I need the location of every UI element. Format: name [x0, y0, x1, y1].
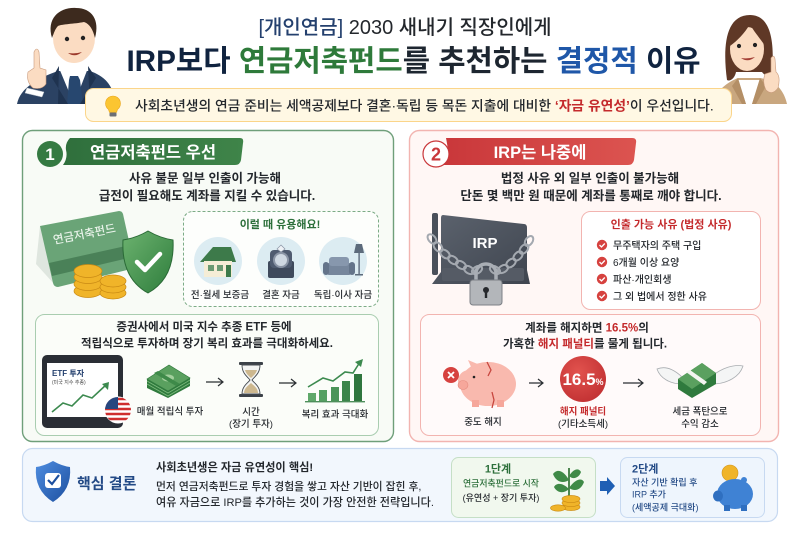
- label: 결혼 자금: 결혼 자금: [262, 289, 300, 301]
- box heading: 인출 가능 사유 (법정 사유): [611, 217, 732, 231]
- box text: [503, 320, 667, 350]
- step 1 card: (유연성 + 장기 투자): [463, 492, 539, 503]
- reason 3: [597, 273, 672, 286]
- number badge 2: [423, 141, 449, 167]
- arrow: [623, 379, 643, 387]
- label: 시간 (장기 투자): (장기 투자): [229, 418, 273, 430]
- box text: 가혹한 해지 패널티를 물게 됩니다.: [503, 336, 667, 350]
- arrow: [279, 379, 296, 387]
- reason 4: 그 외 법에서 정한 사유: [613, 291, 707, 303]
- character: woman in tan jacket pointing up: [713, 15, 787, 104]
- box: ETF investing flow: [36, 314, 378, 436]
- icon: hourglass: [239, 362, 263, 397]
- box text: 적립식으로 투자하며 장기 복리 효과를 극대화하세요.: [81, 336, 333, 350]
- badge: 16.5%: [560, 356, 606, 402]
- number badge 2: 2: [431, 144, 441, 164]
- reason 2: [597, 256, 679, 269]
- panel: key conclusion: [22, 448, 778, 522]
- label: 전·월세 보증금: 전·월세 보증금: [191, 289, 249, 301]
- conclusion text: 여유 자금으로 IRP를 추가하는 것이 가장 안전한 전략입니다.: [156, 495, 434, 509]
- number badge 1: 1: [45, 145, 55, 164]
- icon: cash with wings: [657, 363, 743, 398]
- icon: pension card with shield and coins: [36, 211, 173, 299]
- title line 1: [개인연금] 2030 새내기 직장인에게: [258, 16, 552, 39]
- step 2 card: (세액공제 극대화): [632, 502, 698, 512]
- icon: broken piggy bank: [443, 360, 516, 408]
- box: termination penalty flow: [420, 314, 760, 436]
- label: 시간 (장기 투자): 시간: [242, 407, 260, 418]
- reason 2: 6개월 이상 요양: [613, 256, 679, 269]
- panel subheading: 사유 불문 일부 인출이 가능해: [129, 170, 281, 186]
- panel subheading: 단돈 몇 백만 원 때문에 계좌를 통째로 깨야 합니다.: [460, 188, 722, 203]
- step 1 card: 연금저축펀드로 시작: [463, 478, 539, 488]
- panel subheading: 급전이 필요해도 계좌를 지킬 수 있습니다.: [99, 188, 315, 203]
- icon: chained IRP vault: IRP: [472, 235, 498, 252]
- icon: light bulb: [106, 96, 121, 116]
- conclusion text: [156, 460, 434, 509]
- conclusion text: 사회초년생은 자금 유연성이 핵심!: [156, 460, 313, 474]
- title line 2: IRP보다 연금저축펀드를 추천하는 결정적 이유: [126, 45, 701, 78]
- icon: tablet with ETF chart: (미국 지수 추종): [52, 379, 86, 386]
- icon: chained IRP vault: [426, 213, 535, 305]
- box text: [81, 320, 333, 350]
- box: legal withdrawal reasons: [582, 212, 760, 310]
- chart: compound growth bars: [305, 359, 365, 402]
- icon: sprout on coins: [550, 468, 584, 511]
- step 1 card: [452, 458, 596, 518]
- step 2 card: 2단계: [632, 462, 658, 476]
- icon: US flag: [104, 396, 132, 424]
- step 2 card: 자산 기반 확립 후: [632, 476, 697, 488]
- panel subheading: 법정 사유 외 일부 인출이 불가능해: [501, 170, 679, 186]
- icon: tablet with ETF chart: [42, 355, 132, 428]
- box text: 계좌를 해지하면 16.5%의: [525, 320, 649, 334]
- step 1 card: 1단계: [485, 462, 511, 476]
- title: [126, 16, 701, 78]
- tip banner: [86, 88, 732, 122]
- label: 해지 패널티: [558, 406, 608, 430]
- label: 독립·이사 자금: 독립·이사 자금: [314, 289, 372, 301]
- label: 해지 패널티: (기타소득세): [558, 418, 608, 430]
- label: 세금 폭탄으로 수익 감소: 수익 감소: [681, 418, 719, 430]
- icon: blue piggy bank with coin: [713, 465, 753, 511]
- arrow: step 1 to step 2: [600, 477, 615, 495]
- step 2 card: [620, 458, 764, 518]
- box heading: 이럴 때 유용해요!: [240, 217, 320, 231]
- character: man in suit pointing up: [17, 8, 116, 104]
- label: 세금 폭탄으로 수익 감소: 세금 폭탄으로: [672, 406, 728, 418]
- panel: 연금저축펀드 우선: [22, 130, 394, 442]
- icon: X badge: [443, 367, 459, 383]
- heading bar: [442, 138, 636, 165]
- panel subheading: [460, 170, 722, 203]
- label: 해지 패널티: 해지 패널티: [560, 406, 606, 418]
- arrow: [206, 378, 223, 386]
- box text: 증권사에서 미국 지수 추종 ETF 등에: [116, 320, 292, 334]
- label: 세금 폭탄으로 수익 감소: [672, 406, 728, 430]
- icon: stack of cash: [147, 365, 190, 398]
- box: usage examples: [184, 212, 378, 306]
- tip text: 사회초년생의 연금 준비는 세액공제보다 결혼·독립 등 목돈 지출에 대비한 ‘자금 유연성’이 우선입니다.: [135, 98, 714, 114]
- icon: ring box: [257, 237, 305, 285]
- arrow: [529, 379, 543, 387]
- icon: house: [194, 237, 242, 285]
- icon: pension card with shield and coins: 연금저축펀드: [52, 222, 117, 247]
- number badge 1: [37, 141, 63, 167]
- label: 복리 효과 극대화: 복리 효과 극대화: [302, 408, 368, 420]
- badge: 16.5%: 16.5%: [562, 370, 604, 389]
- icon: tablet with ETF chart: ETF 투자: [52, 369, 85, 378]
- reason 1: 무주택자의 주택 구입: [613, 239, 701, 252]
- icon: blue shield: [36, 461, 70, 502]
- icon: sofa and lamp: [319, 237, 367, 285]
- label: 시간 (장기 투자): [229, 407, 273, 430]
- panel subheading: [99, 170, 315, 203]
- panel heading bar: 연금저축펀드 우선: [90, 143, 216, 162]
- reason 3: 파산·개인회생: [613, 273, 672, 286]
- step 2 card: IRP 추가: [632, 490, 667, 500]
- heading: 핵심 결론: 핵심 결론: [77, 476, 137, 492]
- label: 중도 해지: 중도 해지: [464, 416, 502, 428]
- heading bar: IRP는 나중에: [494, 143, 586, 162]
- panel heading bar: [63, 138, 243, 165]
- conclusion text: 먼저 연금저축펀드로 투자 경험을 쌓고 자산 기반이 잡힌 후,: [156, 479, 421, 493]
- panel: IRP는 나중에: [410, 130, 778, 442]
- label: 매월 적립식 투자: 매월 적립식 투자: [137, 406, 203, 418]
